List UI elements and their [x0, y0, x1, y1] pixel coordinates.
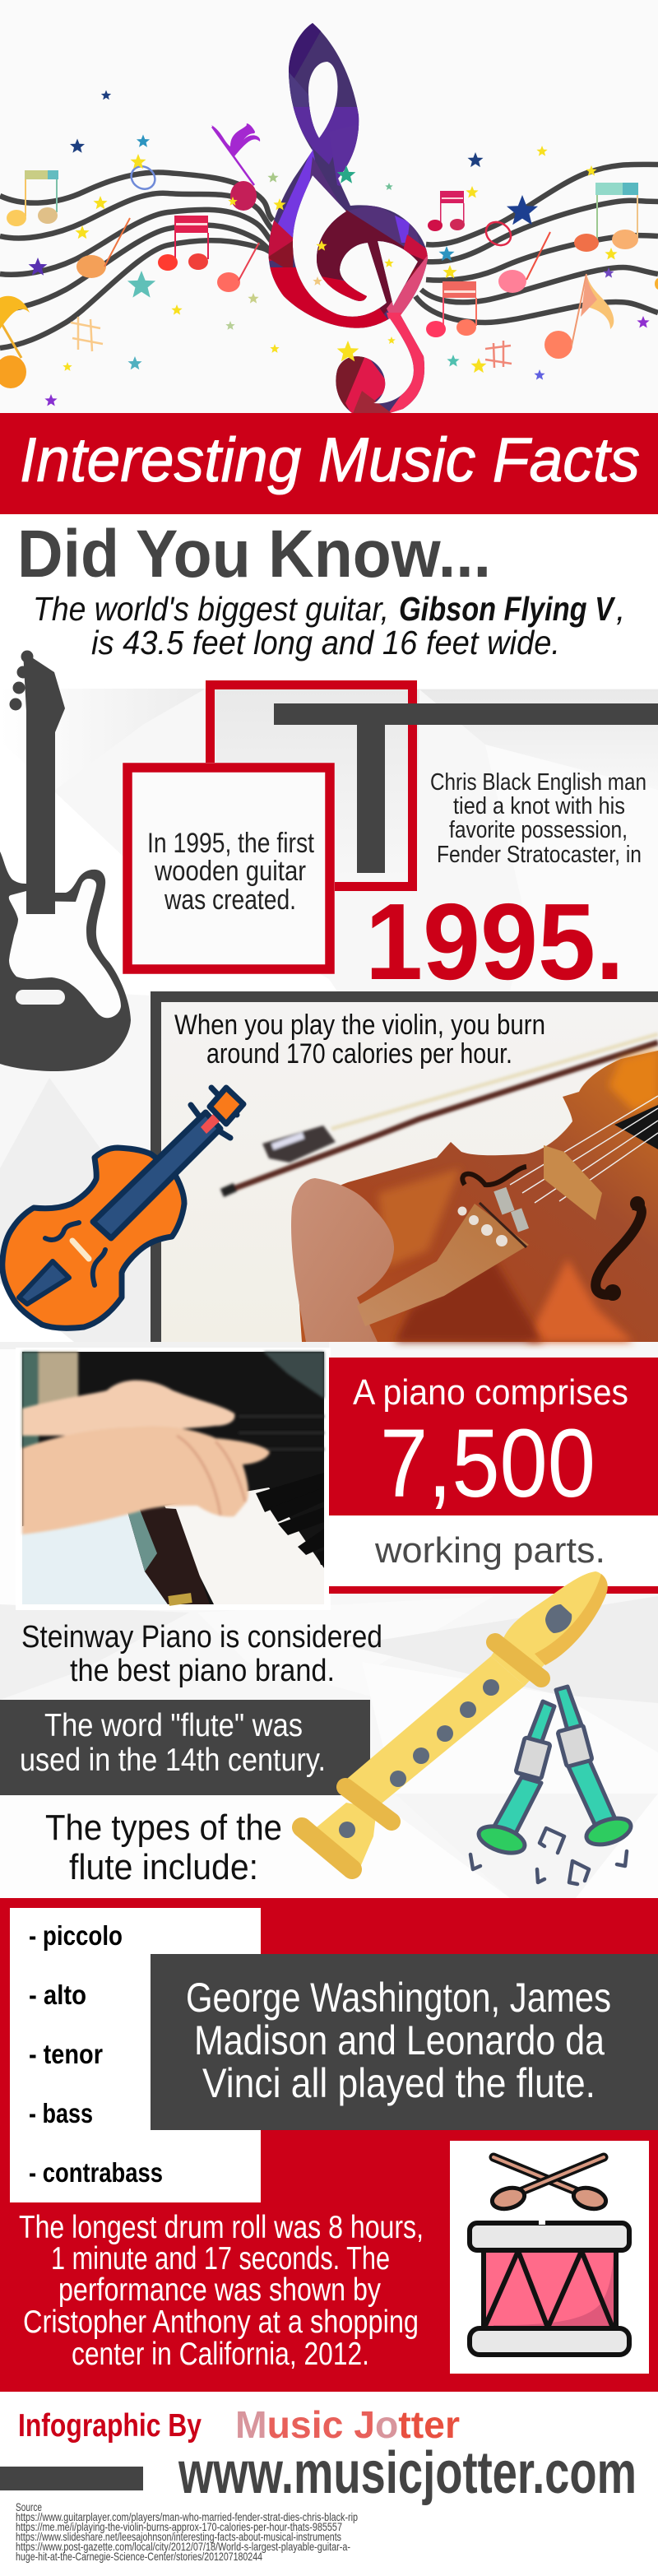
- source list: https://www.post-gazette.com/local/city/2012/07/18/World-s-largest-playable-guitar-a-: [16, 2540, 350, 2553]
- dark T shape: [274, 703, 658, 873]
- source list: [16, 2500, 358, 2563]
- panel: violin photo in dark frame: [151, 991, 658, 1342]
- tailpiece: [357, 1204, 529, 1326]
- orange quaver: [76, 218, 130, 278]
- chris black text: tied a knot with his: [453, 793, 625, 819]
- white keys: [164, 1488, 324, 1604]
- piano lower-left reflection: [22, 1506, 168, 1604]
- pickguard: [9, 879, 121, 1018]
- chris black text: [430, 769, 646, 868]
- headstock tuning pegs: [10, 650, 33, 711]
- source list: https://www.guitarplayer.com/players/man-who-married-fender-strat-dies-chris-black-rip: [16, 2510, 358, 2523]
- music jotter logo: Music Jotter: [235, 2403, 460, 2446]
- biggest guitar fact: is 43.5 feet long and 16 feet wide.: [91, 624, 560, 661]
- fingerboard: [614, 1105, 658, 1149]
- right-edge yellow note: [655, 278, 658, 290]
- violin neck: [93, 1112, 220, 1238]
- tailpiece fittings: [494, 1187, 529, 1232]
- pickup slot: [16, 990, 65, 1005]
- large coral quaver: [544, 274, 614, 359]
- violin fact text: When you play the violin, you burn: [174, 1010, 545, 1041]
- strings: [510, 1096, 658, 1203]
- whole-note rings: [127, 162, 516, 250]
- fallboard: [126, 1506, 210, 1604]
- f-holes: [462, 1167, 642, 1295]
- faceted paper background: [0, 689, 658, 1898]
- panel: famous flute players: Madison and Leonardo da: [194, 2017, 605, 2063]
- panel: flute word fact: [0, 1700, 370, 1795]
- crimson beamed note: [428, 191, 465, 231]
- steinway text: [21, 1620, 382, 1688]
- red beamed note: [158, 216, 209, 271]
- source list: huge-hit-at-the-Carnegie-Science-Center/stories/201207180244: [16, 2550, 262, 2563]
- violin fact text: [174, 1010, 545, 1070]
- flute types heading: The types of the: [45, 1808, 282, 1848]
- panel: flute types list: - piccolo: [29, 1920, 123, 1951]
- panel: piano parts: [329, 1358, 658, 1594]
- panel: drum icon box: [450, 2141, 649, 2374]
- top-left beamed note: [7, 170, 58, 226]
- infographic by label: Infographic By: [18, 2408, 202, 2444]
- coral beamed note: [426, 281, 477, 337]
- flute holes: [339, 1604, 572, 1838]
- drum roll text: center in California, 2012.: [72, 2337, 369, 2372]
- first wooden guitar text: In 1995, the first: [147, 828, 314, 859]
- panel: flute types list: - bass: [29, 2098, 93, 2128]
- bridge: [544, 1145, 602, 1220]
- icon: drum: [470, 2218, 629, 2355]
- panel: flute types list: - tenor: [29, 2039, 103, 2069]
- source list: https://www.slideshare.net/leesajohnson/interesting-facts-about-musical-instruments: [16, 2530, 341, 2543]
- title banner: [0, 413, 658, 514]
- panel: flute types list: - contrabass: [29, 2157, 163, 2188]
- sharp signs: [71, 317, 512, 368]
- tailpiece: [19, 1261, 69, 1304]
- title text: Interesting Music Facts: [20, 425, 640, 495]
- source list: https://me.me/i/playing-the-violin-burns-approx-170-calories-per-hour-thats-985557: [16, 2520, 342, 2533]
- drum roll text: 1 minute and 17 seconds. The: [51, 2241, 390, 2277]
- hands: [22, 1381, 270, 1534]
- chin rest shadow and rest: [291, 1178, 394, 1342]
- stars: [29, 91, 650, 406]
- bridge: [72, 1241, 89, 1259]
- drum roll text: Cristopher Anthony at a shopping: [23, 2304, 419, 2340]
- biggest guitar fact: ,: [616, 590, 625, 628]
- bow: [222, 1034, 658, 1193]
- big year 1995: 1995.: [365, 881, 624, 1002]
- icon: orange violin: [2, 1088, 243, 1328]
- teal beamed note: [574, 183, 638, 252]
- first wooden guitar text: was created.: [164, 884, 296, 916]
- did you know heading: Did You Know...: [17, 517, 491, 592]
- pink quaver: [498, 232, 550, 293]
- violin body: [294, 1051, 658, 1342]
- panel: famous flute players: Vinci all played the flute.: [202, 2060, 595, 2106]
- steinway text: the best piano brand.: [70, 1654, 335, 1688]
- text: a piano comprises: A piano comprises: [353, 1372, 628, 1413]
- icon: drumsticks: [490, 2157, 608, 2212]
- panel: red section: [0, 1898, 658, 2392]
- f-holes: [45, 1223, 105, 1285]
- chris black text: favorite possession,: [449, 817, 628, 843]
- header illustration: music staff and treble clef: [0, 0, 658, 420]
- treble clef: [268, 23, 428, 413]
- coral quaver: [217, 243, 259, 292]
- source list: Source: [16, 2500, 42, 2513]
- flute types heading: flute include:: [69, 1847, 258, 1887]
- panel: famous flute players: [151, 1954, 658, 2130]
- violin head: [210, 1088, 243, 1124]
- flute types heading: [45, 1808, 282, 1887]
- dark accent bar: [0, 2467, 143, 2490]
- left-edge yellow note: [0, 296, 30, 388]
- first wooden guitar text: wooden guitar: [154, 856, 306, 887]
- violin pegs: [191, 1088, 237, 1138]
- black keys: [256, 1473, 324, 1565]
- red frames block: [127, 685, 658, 969]
- panel: piano photo: [16, 1348, 331, 1610]
- panel: flute word fact: used in the 14th century.: [20, 1743, 326, 1778]
- staff lines: [0, 165, 658, 348]
- back red frame: [211, 685, 413, 887]
- icon: electric guitar: [0, 650, 131, 1071]
- guitar neck over body: [26, 864, 55, 914]
- front red frame: [127, 768, 330, 969]
- drum roll text: performance was shown by: [58, 2272, 381, 2308]
- panel: flute word fact: The word "flute" was: [44, 1708, 303, 1743]
- violin fact text: around 170 calories per hour.: [206, 1038, 512, 1070]
- first wooden guitar text: [147, 828, 314, 916]
- purple flag note: [211, 123, 260, 211]
- icon: teal split flute with notes: [470, 1687, 634, 1884]
- text: working parts: working parts.: [374, 1530, 605, 1571]
- steinway text: Steinway Piano is considered: [21, 1620, 382, 1655]
- small music notes: [470, 1828, 627, 1884]
- panel: flute types list: [10, 1908, 261, 2202]
- biggest guitar fact: The world's biggest guitar,: [33, 590, 389, 628]
- drum roll text: [19, 2210, 424, 2372]
- biggest guitar fact: Gibson Flying V: [399, 590, 616, 628]
- panel: flute types list: - alto: [29, 1980, 86, 2010]
- icon: yellow recorder flute: [302, 1571, 608, 1869]
- drum roll text: The longest drum roll was 8 hours,: [19, 2210, 424, 2245]
- biggest guitar fact: [33, 590, 625, 661]
- number 7,500: 7,500: [380, 1409, 595, 1518]
